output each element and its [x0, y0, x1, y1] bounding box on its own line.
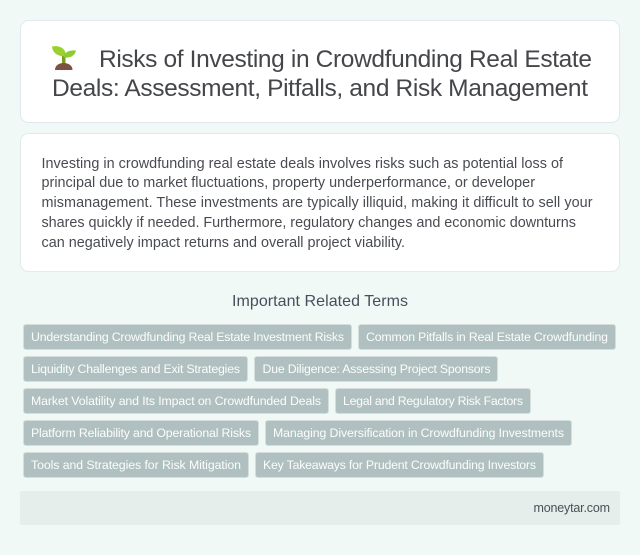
tag: [266, 420, 572, 446]
summary text: principal due to market fluctuations, property underperformance, or developer: [42, 175, 535, 191]
icon: sprout: [52, 46, 76, 70]
title: Risks of Investing in Crowdfunding Real Estate: [99, 46, 592, 73]
footer: [20, 491, 620, 525]
tag: Tools and Strategies for Risk Mitigation: [31, 458, 241, 472]
summary text: [42, 156, 593, 251]
tag: [358, 324, 616, 350]
summary text: shares quickly if needed. Furthermore, regulatory changes and economic downturns: [42, 215, 576, 231]
source: moneytar.com: [534, 501, 610, 515]
tag: Managing Diversification in Crowdfunding Investments: [273, 426, 564, 440]
heading: important related terms: Important Related Terms: [232, 293, 408, 310]
panel: title card: [20, 20, 620, 122]
tag: Understanding Crowdfunding Real Estate Investment Risks: [31, 330, 344, 344]
summary text: can negatively impact returns and overall project viability.: [42, 235, 405, 251]
tag: Key Takeaways for Prudent Crowdfunding Investors: [263, 458, 536, 472]
tag: [256, 452, 544, 478]
tag: Due Diligence: Assessing Project Sponsors: [262, 362, 490, 376]
tag: Liquidity Challenges and Exit Strategies: [31, 362, 240, 376]
title: Deals: Assessment, Pitfalls, and Risk Management: [52, 75, 588, 102]
tag: Platform Reliability and Operational Risks: [31, 426, 251, 440]
tag: [24, 420, 258, 446]
title: [52, 46, 592, 102]
tag: Market Volatility and Its Impact on Crowdfunded Deals: [31, 394, 321, 408]
tag: [336, 388, 530, 414]
summary text: mismanagement. These investments are typically illiquid, making it difficult to sell your: [42, 195, 593, 211]
summary text: Investing in crowdfunding real estate deals involves risks such as potential loss of: [42, 156, 564, 172]
tag: [24, 388, 328, 414]
panel: summary card: [20, 134, 620, 272]
panel: related term tags: [24, 324, 616, 478]
tag: [24, 324, 352, 350]
tag: Common Pitfalls in Real Estate Crowdfunding: [366, 330, 608, 344]
tag: [24, 452, 248, 478]
tag: Legal and Regulatory Risk Factors: [343, 394, 523, 408]
tag: [24, 356, 248, 382]
tag: [254, 356, 498, 382]
